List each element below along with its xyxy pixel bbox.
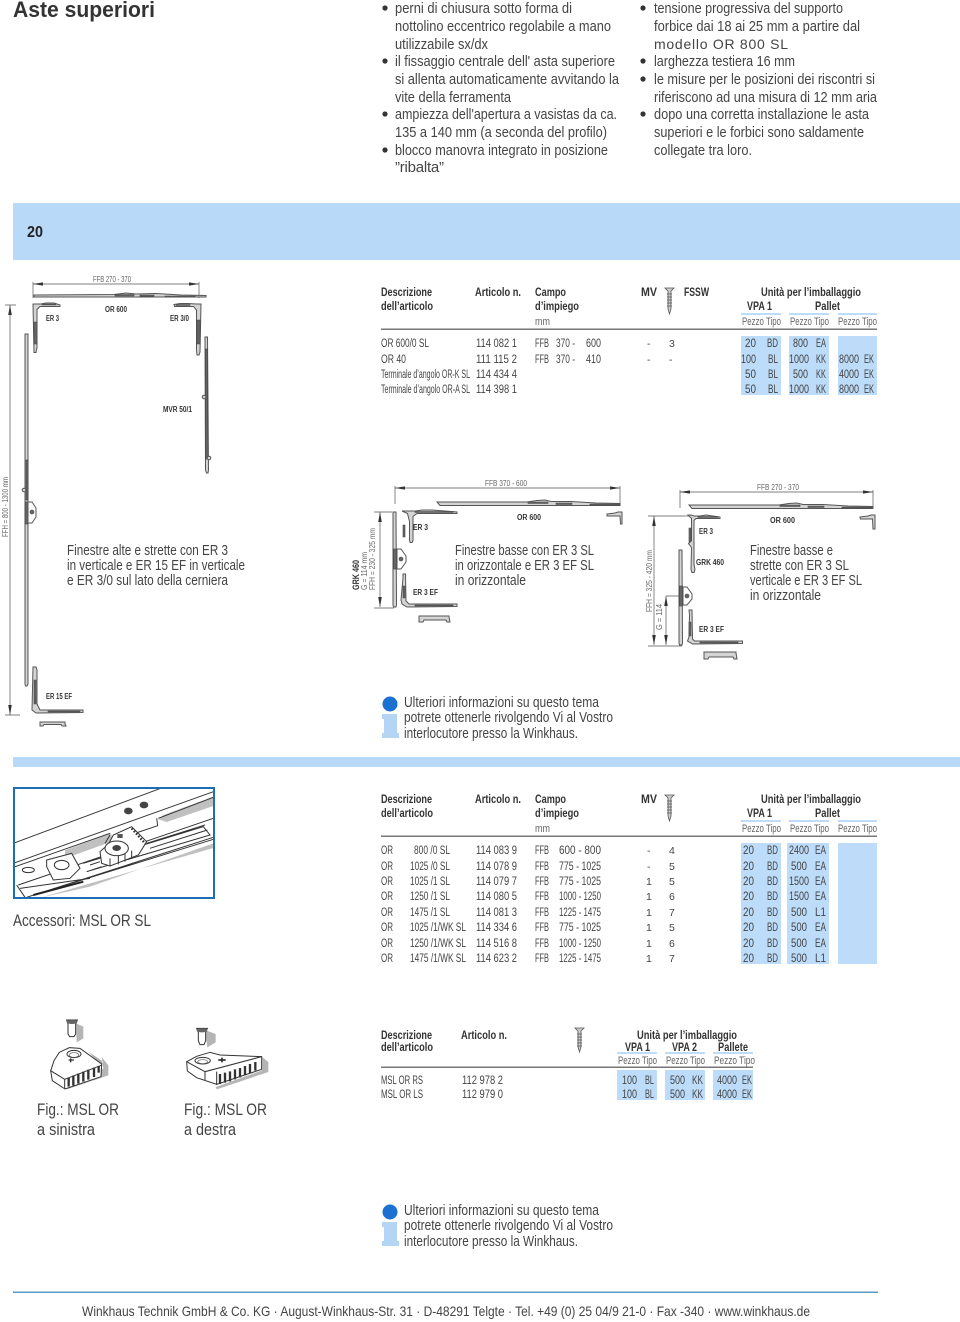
- callout: further information 1: [382, 695, 613, 742]
- table rows: 600: [586, 338, 601, 350]
- table rows: EK: [742, 1075, 752, 1087]
- callout: further information 1: interlocutore presso la Winkhaus.: [404, 726, 578, 742]
- table rows: 4000: [717, 1089, 737, 1101]
- table header: VPA 1: [747, 808, 772, 820]
- table rows: 500: [791, 922, 807, 934]
- table header: [381, 794, 877, 837]
- diagram: low narrow windows hardware: G = 114: [655, 603, 664, 630]
- diagram: low windows hardware: ER 3: [413, 523, 428, 532]
- table header: dell’articolo: [381, 301, 433, 313]
- table header: dell’articolo: [381, 808, 433, 820]
- table header: Descrizione: [381, 1030, 432, 1042]
- table rows: 1: [646, 938, 652, 950]
- text block: feature list left: 135 a 140 mm (a seconda del profilo): [395, 124, 607, 141]
- table header: Articolo n.: [461, 1030, 507, 1042]
- diagram: low windows hardware: ER 3 EF: [413, 588, 438, 597]
- table rows: 500: [670, 1075, 685, 1087]
- caption: low windows: [455, 543, 594, 589]
- table rows: 114 434 4: [476, 369, 517, 381]
- table header: Descrizione: [381, 794, 432, 806]
- text block: feature list right: dopo una corretta installazione le asta: [654, 106, 870, 123]
- caption: MSL OR left: [37, 1100, 119, 1139]
- text block: feature list left: blocco manovra integrato in posizione: [395, 142, 608, 159]
- table rows: 1: [646, 907, 652, 919]
- table header: Articolo n.: [475, 794, 521, 806]
- table header: mm: [535, 316, 550, 328]
- section band: 20: [13, 203, 960, 260]
- table rows: 1225 - 1475: [559, 953, 601, 965]
- table header: Articolo n.: [475, 287, 521, 299]
- table rows: OR: [381, 845, 393, 857]
- table rows: 100: [622, 1089, 637, 1101]
- table rows: FFB: [535, 907, 549, 919]
- diagram: low windows hardware: FFH = 230 - 325 mm: [368, 528, 377, 590]
- table rows: 20: [743, 845, 754, 857]
- text block: feature list left: utilizzabile sx/dx: [395, 36, 488, 53]
- diagram: tall narrow window hardware: [1, 275, 211, 726]
- diagram: low windows hardware: OR 600: [517, 513, 541, 522]
- table header: VPA 1: [625, 1042, 650, 1054]
- table rows: FFB: [535, 338, 549, 350]
- diagram: tall narrow window hardware: FFH = 800 - 1300 mm: [1, 477, 10, 537]
- table rows: MSL OR RS: [381, 1075, 423, 1087]
- table rows: 1000 - 1250: [559, 891, 601, 903]
- table rows: 20: [743, 953, 754, 965]
- caption: tall narrow windows: e ER 3/0 sul lato della cerniera: [67, 573, 229, 589]
- table rows: 114 078 9: [476, 861, 517, 873]
- callout: further information 2: [382, 1203, 613, 1250]
- caption: low narrow windows: [750, 543, 862, 604]
- table rows: -: [669, 354, 673, 366]
- caption: low narrow windows: verticale e ER 3 EF SL: [750, 573, 862, 589]
- diagram: low windows hardware: GRK 460: [351, 560, 361, 590]
- caption: tall narrow windows: [67, 543, 245, 589]
- table: MSL OR parts: [381, 1028, 755, 1101]
- table rows: EK: [864, 384, 874, 396]
- table rows: OR: [381, 922, 393, 934]
- table rows: 114 081 3: [476, 907, 517, 919]
- table rows: 370 -: [556, 338, 575, 350]
- table rows: 370 -: [556, 354, 575, 366]
- callout: further information 2: interlocutore presso la Winkhaus.: [404, 1234, 578, 1250]
- table rows: BD: [767, 845, 778, 857]
- table rows: 1000 - 1250: [559, 938, 601, 950]
- table rows: BL: [645, 1089, 654, 1101]
- table rows: 4000: [717, 1075, 737, 1087]
- table header: VPA 2: [672, 1042, 697, 1054]
- diagram: low windows hardware: [351, 479, 622, 622]
- caption: low windows: in orizzontale e ER 3 EF SL: [455, 558, 594, 574]
- table rows: -: [647, 861, 651, 873]
- table rows: OR 600/0 SL: [381, 338, 429, 350]
- divider band: [13, 757, 960, 767]
- table rows: 114 398 1: [476, 384, 517, 396]
- table rows: [381, 1075, 752, 1101]
- table rows: EK: [742, 1089, 752, 1101]
- table rows: OR 40: [381, 354, 406, 366]
- table header: mm: [535, 823, 550, 835]
- table rows: BD: [767, 876, 778, 888]
- table rows: [381, 845, 826, 965]
- diagram: tall narrow window hardware: ER 15 EF: [46, 692, 72, 701]
- table header: [381, 287, 877, 330]
- table rows: OR: [381, 861, 393, 873]
- table rows: 114 516 8: [476, 938, 517, 950]
- text block: feature list left: ampiezza dell'apertura a vasistas da ca.: [395, 106, 617, 123]
- caption: MSL OR right: a destra: [184, 1120, 236, 1139]
- table rows: 410: [586, 354, 601, 366]
- table rows: 1: [646, 891, 652, 903]
- table rows: FFB: [535, 953, 549, 965]
- table rows: -: [647, 845, 651, 857]
- table rows: 1025 /1 SL: [410, 876, 450, 888]
- table rows: BL: [768, 384, 778, 396]
- caption: MSL OR right: Fig.: MSL OR: [184, 1100, 267, 1119]
- icon: screw: [665, 795, 674, 821]
- table rows: 500: [791, 953, 807, 965]
- text block: feature list right: superiori e le forbici sono saldamente: [654, 124, 864, 141]
- table rows: EA: [816, 338, 826, 350]
- table rows: 114 623 2: [476, 953, 517, 965]
- table rows: 20: [743, 861, 754, 873]
- table rows: OR: [381, 891, 393, 903]
- table header: Unità per l’imballaggio: [637, 1030, 737, 1042]
- caption: MSL OR right: [184, 1100, 267, 1139]
- unit columns: [741, 843, 877, 964]
- table header: Campo: [535, 794, 566, 806]
- table rows: 600 - 800: [559, 845, 601, 857]
- table rows: BD: [767, 938, 778, 950]
- table rows: 5: [669, 922, 675, 934]
- table rows: 20: [743, 891, 754, 903]
- callout: further information 2: potrete ottenerle rivolgendo Vi al Vostro: [404, 1218, 613, 1234]
- table rows: 6: [669, 938, 675, 950]
- icon: screw: [665, 288, 674, 314]
- diagram: tall narrow window hardware: OR 600: [105, 305, 127, 314]
- table header: Pezzo Tipo: [666, 1055, 705, 1067]
- table header: Pezzo Tipo: [790, 823, 829, 835]
- table rows: BD: [767, 922, 778, 934]
- table header: MV: [641, 287, 657, 299]
- table rows: EA: [815, 845, 826, 857]
- text block: feature list right: tensione progressiva del supporto: [654, 0, 843, 17]
- text block: feature list right: forbice dai 18 ai 25 mm a partire dal: [654, 18, 860, 35]
- table rows: EA: [815, 876, 826, 888]
- caption: MSL OR left: Fig.: MSL OR: [37, 1100, 119, 1119]
- diagram: low windows hardware: FFB 370 - 600: [485, 479, 527, 488]
- table rows: 20: [743, 922, 754, 934]
- table rows: BL: [768, 369, 778, 381]
- table rows: 8000: [839, 354, 859, 366]
- table rows: 1: [646, 876, 652, 888]
- caption: low windows: Finestre basse con ER 3 SL: [455, 543, 594, 559]
- table rows: BD: [767, 338, 778, 350]
- table rows: OR: [381, 876, 393, 888]
- table rows: 20: [743, 876, 754, 888]
- table header: MV: [641, 794, 657, 806]
- text block: feature list right: [640, 0, 878, 159]
- table rows: 2400: [789, 845, 809, 857]
- caption: low narrow windows: strette con ER 3 SL: [750, 558, 849, 574]
- table rows: 1025 /1/WK SL: [410, 922, 466, 934]
- table header: Descrizione: [381, 287, 432, 299]
- table rows: 111 115 2: [476, 354, 517, 366]
- diagram: tall narrow window hardware: ER 3/0: [170, 314, 189, 323]
- caption: low windows: in orizzontale: [455, 573, 526, 589]
- table header: Pallet: [815, 808, 840, 820]
- table header: FSSW: [684, 287, 709, 299]
- footer: Winkhaus Technik GmbH & Co. KG · August-Winkhaus-Str. 31 · D-48291 Telgte · Tel. +49 (0) 25 04/9 21-0 · Fax -340 · www.winkhaus.de: [82, 1303, 810, 1319]
- diagram: low narrow windows hardware: ER 3: [699, 527, 713, 536]
- table rows: 500: [791, 907, 807, 919]
- table rows: 800 /0 SL: [414, 845, 450, 857]
- table rows: EA: [815, 891, 826, 903]
- table rows: -: [647, 338, 651, 350]
- text block: feature list right: larghezza testiera 16 mm: [654, 53, 795, 70]
- table header: Pezzo Tipo: [742, 316, 781, 328]
- callout: further information 1: potrete ottenerle rivolgendo Vi al Vostro: [404, 710, 613, 726]
- table rows: 1025 /0 SL: [410, 861, 450, 873]
- table rows: 114 079 7: [476, 876, 517, 888]
- diagram: low windows hardware: G = 114 mm: [360, 552, 369, 590]
- text block: feature list left: vite della ferramenta: [395, 89, 512, 106]
- table rows: OR: [381, 907, 393, 919]
- table rows: 5: [669, 876, 675, 888]
- table header: dell’articolo: [381, 1042, 433, 1054]
- heading: accessories: Accessori: MSL OR SL: [13, 911, 151, 930]
- table rows: 20: [745, 338, 756, 350]
- table rows: Terminale d’angolo OR-A SL: [381, 384, 470, 396]
- text block: feature list right: collegate tra loro.: [654, 142, 752, 159]
- table rows: 500: [793, 369, 808, 381]
- caption: low narrow windows: in orizzontale: [750, 588, 821, 604]
- table rows: FFB: [535, 845, 549, 857]
- icon: screw: [575, 1028, 584, 1052]
- section band: 20: 20: [27, 224, 43, 241]
- diagram: tall narrow window hardware: ER 3: [46, 314, 59, 323]
- diagram: low narrow windows hardware: ER 3 EF: [699, 625, 724, 634]
- table header: Pallete: [718, 1042, 748, 1054]
- table rows: KK: [816, 384, 826, 396]
- table rows: OR: [381, 938, 393, 950]
- table rows: 20: [743, 907, 754, 919]
- table rows: 4: [669, 845, 675, 857]
- table rows: OR: [381, 953, 393, 965]
- table rows: 112 978 2: [462, 1075, 503, 1087]
- table rows: BD: [767, 907, 778, 919]
- table rows: 1250 /1/WK SL: [410, 938, 466, 950]
- caption: MSL OR left: a sinistra: [37, 1120, 95, 1139]
- table rows: FFB: [535, 938, 549, 950]
- table rows: FFB: [535, 891, 549, 903]
- table rows: 7: [669, 953, 675, 965]
- table: upper hardware articles: [381, 287, 877, 396]
- text block: feature list left: nottolino eccentrico regolabile a mano: [395, 18, 611, 35]
- table rows: 1: [646, 922, 652, 934]
- text block: feature list right: le misure per le posizioni dei riscontri si: [654, 71, 875, 88]
- table rows: 5: [669, 861, 675, 873]
- table rows: EA: [815, 922, 826, 934]
- table rows: 100: [622, 1075, 637, 1087]
- caption: low narrow windows: Finestre basse e: [750, 543, 833, 559]
- unit columns: [617, 1070, 753, 1100]
- table rows: FFB: [535, 922, 549, 934]
- table rows: BL: [768, 354, 778, 366]
- table rows: 1: [646, 953, 652, 965]
- table rows: BL: [645, 1075, 654, 1087]
- table header: Unità per l’imballaggio: [761, 794, 861, 806]
- table rows: 1475 /1 SL: [410, 907, 450, 919]
- table header: [381, 1030, 755, 1068]
- table rows: -: [647, 354, 651, 366]
- table header: VPA 1: [747, 301, 772, 313]
- text block: feature list left: si allenta automaticamente avvitando la: [395, 71, 620, 88]
- table header: d’impiego: [535, 808, 579, 820]
- table rows: 50: [745, 384, 756, 396]
- table rows: KK: [816, 354, 826, 366]
- unit columns: [741, 336, 877, 395]
- table rows: KK: [816, 369, 826, 381]
- table rows: 4000: [839, 369, 859, 381]
- table: MSL OR SL articles: [381, 794, 877, 965]
- table rows: 775 - 1025: [559, 922, 601, 934]
- table rows: 3: [669, 338, 675, 350]
- table header: d’impiego: [535, 301, 579, 313]
- table header: Pezzo Tipo: [742, 823, 781, 835]
- table rows: EA: [815, 938, 826, 950]
- table rows: FFB: [535, 354, 549, 366]
- table header: Pezzo Tipo: [618, 1055, 657, 1067]
- table rows: 114 334 6: [476, 922, 517, 934]
- figure: MSL OR left: [51, 1020, 108, 1089]
- diagram: low narrow windows hardware: FFB 270 - 370: [757, 483, 799, 492]
- table rows: KK: [692, 1075, 703, 1087]
- table header: Pezzo Tipo: [838, 316, 877, 328]
- table header: Campo: [535, 287, 566, 299]
- table rows: 1475 /1/WK SL: [410, 953, 466, 965]
- text block: feature list left: ”ribalta”: [395, 159, 444, 176]
- table rows: 1500: [789, 891, 809, 903]
- table rows: EK: [864, 369, 874, 381]
- table rows: 500: [791, 861, 807, 873]
- table rows: BD: [767, 891, 778, 903]
- text block: feature list left: perni di chiusura sotto forma di: [395, 0, 572, 17]
- callout: further information 1: Ulteriori informazioni su questo tema: [404, 695, 600, 711]
- table rows: 8000: [839, 384, 859, 396]
- table rows: BD: [767, 861, 778, 873]
- diagram: low narrow windows hardware: FFH = 325 - 420 mm: [645, 550, 654, 612]
- table header: Pallet: [815, 301, 840, 313]
- table rows: 1000: [789, 354, 809, 366]
- table rows: 20: [743, 938, 754, 950]
- table rows: 500: [791, 938, 807, 950]
- caption: tall narrow windows: in verticale e ER 15 EF in verticale: [67, 558, 245, 574]
- diagram: tall narrow window hardware: MVR 50/1: [163, 405, 192, 414]
- table rows: 7: [669, 907, 675, 919]
- table rows: EK: [864, 354, 874, 366]
- table header: Unità per l’imballaggio: [761, 287, 861, 299]
- table rows: BD: [767, 953, 778, 965]
- table rows: L1: [815, 907, 826, 919]
- table rows: L1: [815, 953, 826, 965]
- table rows: 775 - 1025: [559, 876, 601, 888]
- table rows: 100: [741, 354, 756, 366]
- callout: further information 2: Ulteriori informazioni su questo tema: [404, 1203, 600, 1219]
- table rows: MSL OR LS: [381, 1089, 423, 1101]
- table header: Pezzo Tipo: [714, 1055, 755, 1067]
- diagram: tall narrow window hardware: FFB 270 - 370: [93, 275, 131, 284]
- photo: MSL OR SL accessory: [13, 787, 214, 898]
- table rows: 1225 - 1475: [559, 907, 601, 919]
- table rows: 114 080 5: [476, 891, 517, 903]
- table header: Pezzo Tipo: [790, 316, 829, 328]
- diagram: low narrow windows hardware: GRK 460: [696, 558, 724, 567]
- diagram: low narrow windows hardware: [645, 483, 875, 659]
- text block: feature list right: riferiscono ad una misura di 12 mm aria: [654, 89, 878, 106]
- text block: feature list left: [382, 0, 620, 176]
- table rows: 50: [745, 369, 756, 381]
- table rows: 775 - 1025: [559, 861, 601, 873]
- caption: tall narrow windows: Finestre alte e strette con ER 3: [67, 543, 228, 559]
- table rows: 114 082 1: [476, 338, 517, 350]
- table rows: KK: [692, 1089, 703, 1101]
- table rows: 6: [669, 891, 675, 903]
- table rows: EA: [815, 861, 826, 873]
- table rows: 1000: [789, 384, 809, 396]
- table rows: [381, 338, 874, 396]
- table rows: FFB: [535, 861, 549, 873]
- table header: Pezzo Tipo: [838, 823, 877, 835]
- table rows: 1500: [789, 876, 809, 888]
- table rows: 500: [670, 1089, 685, 1101]
- table rows: 114 083 9: [476, 845, 517, 857]
- table rows: Terminale d’angolo OR-K SL: [381, 369, 470, 381]
- table rows: FFB: [535, 876, 549, 888]
- table rows: 1250 /1 SL: [410, 891, 450, 903]
- table rows: 112 979 0: [462, 1089, 503, 1101]
- text block: feature list left: il fissaggio centrale dell' asta superiore: [395, 53, 615, 70]
- table rows: 800: [793, 338, 808, 350]
- figure: MSL OR right: [187, 1028, 268, 1089]
- text block: feature list right: modello OR 800 SL: [654, 36, 788, 52]
- diagram: low narrow windows hardware: OR 600: [770, 516, 795, 525]
